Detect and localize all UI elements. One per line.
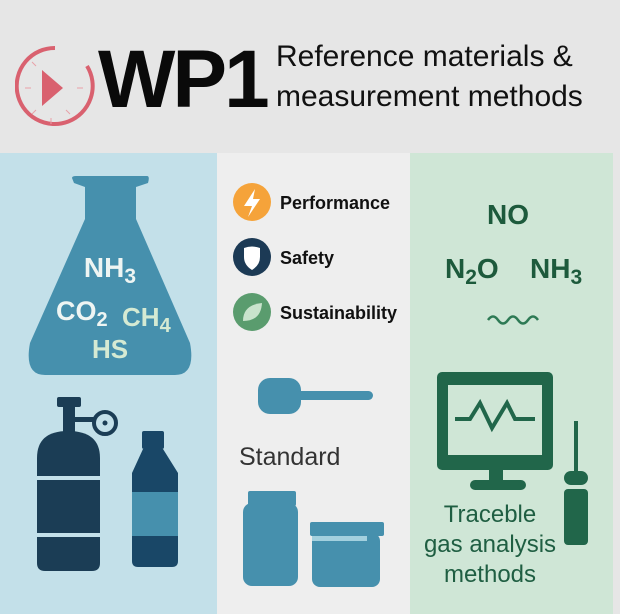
panel: gases left: [0, 153, 217, 614]
flask text: 3: [124, 265, 136, 288]
text: traceable methods: [424, 501, 556, 588]
icon: wave: [488, 316, 538, 324]
icon: flask: CO: [56, 296, 96, 326]
title: WP1: [98, 34, 267, 125]
icon: gas cylinder: [37, 397, 116, 571]
icon: probe: [564, 421, 588, 545]
criteria labels: Sustainability: [280, 303, 397, 323]
gas formulas: [445, 199, 582, 289]
criteria labels: Performance: [280, 193, 390, 213]
icon: flask: 2: [96, 309, 108, 331]
icon: bottle: [132, 431, 178, 567]
icon: timer play: [15, 46, 95, 126]
icon: spoon: [258, 378, 373, 414]
icon: monitor: [437, 372, 553, 490]
header: [0, 0, 620, 153]
text: traceable methods: methods: [444, 561, 536, 588]
criteria labels: [280, 193, 397, 323]
criteria labels: Safety: [280, 248, 334, 268]
icon: flask: [28, 176, 192, 571]
subtitle: measurement methods: [276, 80, 583, 113]
gas formulas: 3: [570, 266, 582, 289]
panel: methods right: [410, 153, 613, 614]
icon: leaf: [233, 293, 271, 331]
gas formulas: N: [445, 253, 465, 284]
subtitle: [276, 40, 583, 113]
icon: jar: [243, 491, 298, 586]
panel: criteria middle: [217, 153, 410, 614]
icon: lightning: [233, 183, 271, 221]
icon: flask: 4: [160, 315, 172, 337]
icon: flask: HS: [92, 334, 128, 364]
gas formulas: O: [477, 253, 499, 284]
text: traceable methods: Traceble: [444, 501, 536, 528]
icon: flask: CH: [122, 302, 160, 332]
icon: container: [310, 522, 384, 587]
gas formulas: 2: [465, 266, 477, 289]
gas formulas: NH: [530, 253, 570, 284]
label: Standard: Standard: [239, 443, 340, 471]
flask text: NH: [84, 252, 124, 283]
text: traceable methods: gas analysis: [424, 531, 556, 558]
gas formulas: NO: [487, 199, 529, 230]
icon: shield: [233, 238, 271, 276]
subtitle: Reference materials &: [276, 40, 573, 73]
